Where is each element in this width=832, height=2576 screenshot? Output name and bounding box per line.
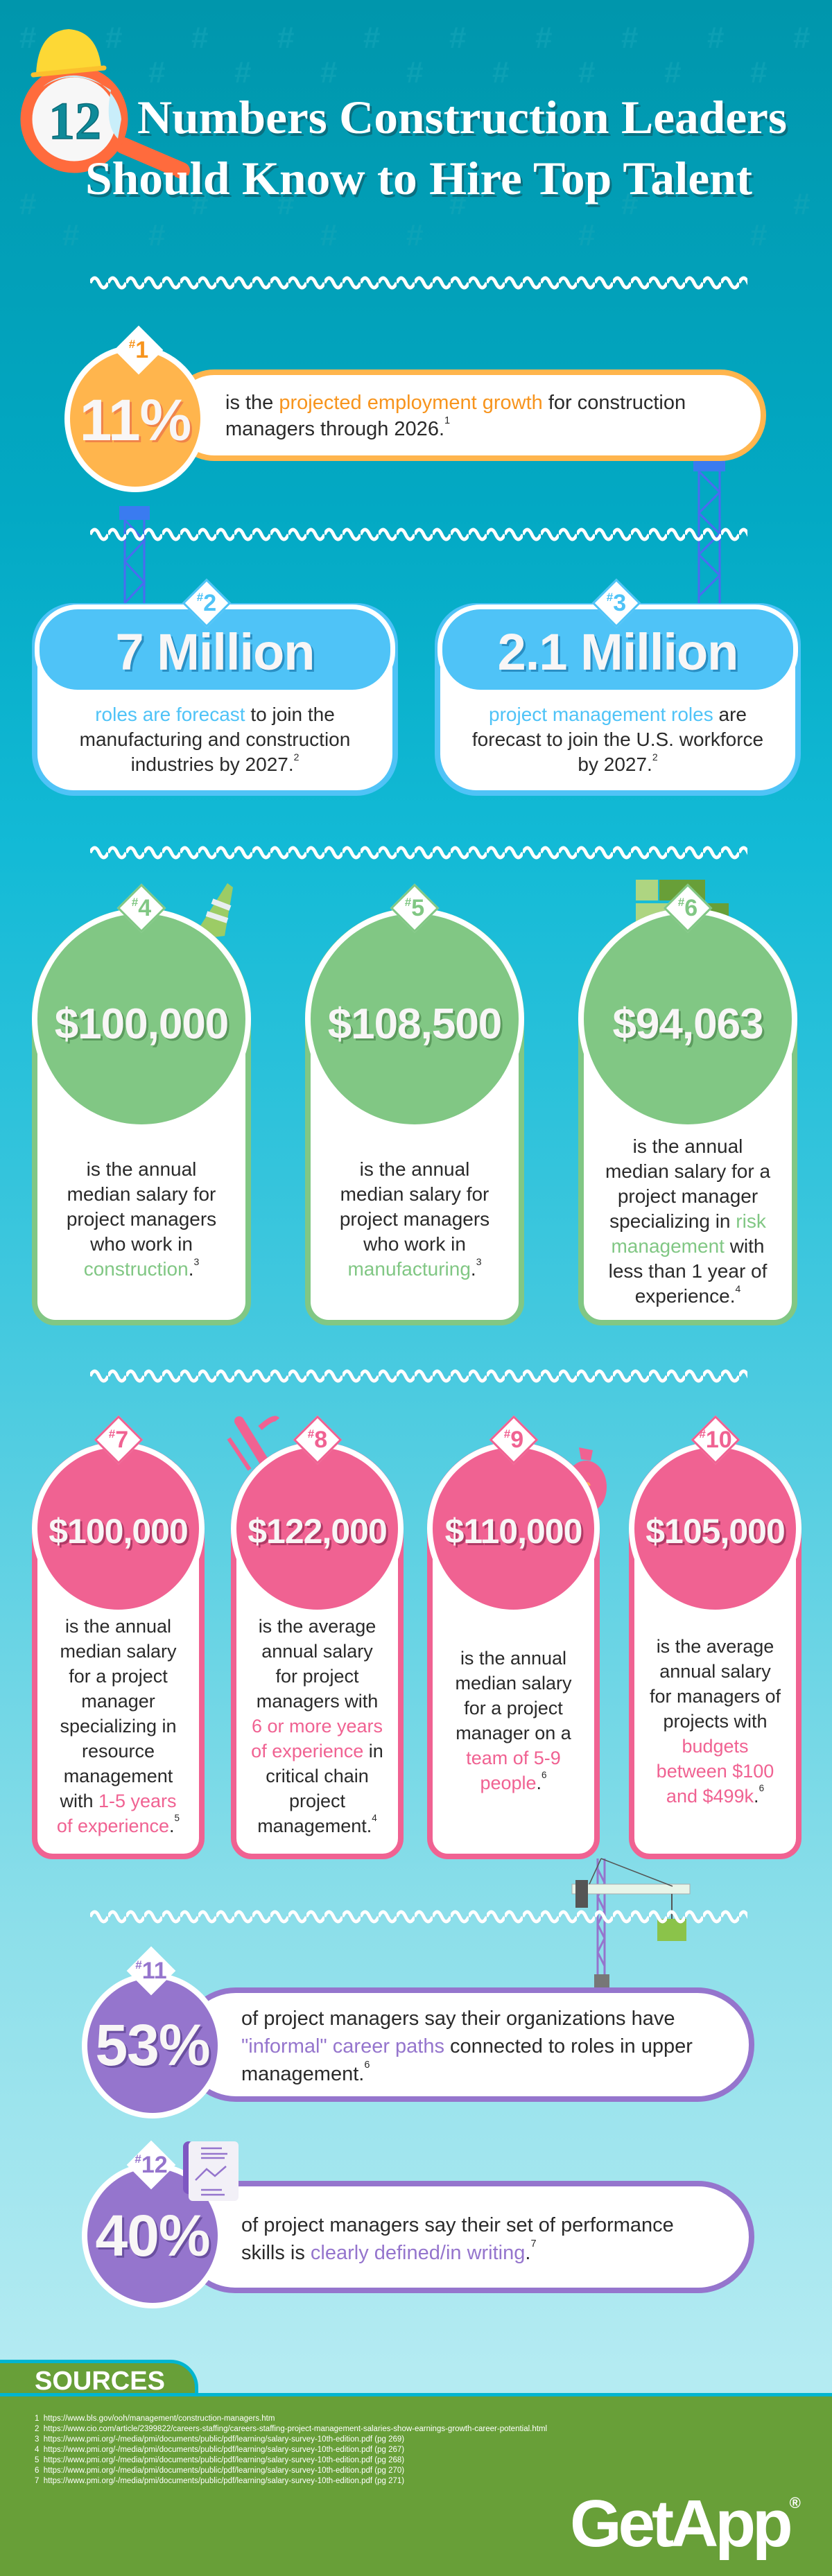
- text: is the annual: [360, 1158, 469, 1180]
- text: projects with: [663, 1711, 768, 1732]
- text: management.6: [241, 2060, 370, 2085]
- badge: #5: [405, 895, 424, 921]
- background hash marks: #: [406, 55, 423, 89]
- text: management.4: [257, 1813, 377, 1836]
- badge: [116, 883, 166, 933]
- text: median salary for: [340, 1183, 489, 1205]
- text: specializing in risk: [609, 1210, 766, 1232]
- badge: [691, 1416, 740, 1464]
- text: and $499k.6: [666, 1783, 764, 1807]
- text: team of 5-9: [466, 1748, 561, 1768]
- stat: 7 Million: [115, 623, 315, 681]
- text: is the projected employment growth for construction: [225, 392, 686, 414]
- text: project managers: [340, 1208, 489, 1230]
- text: specializing in: [60, 1716, 177, 1737]
- title: Should Know to Hire Top Talent: [85, 152, 752, 204]
- panel #4: [32, 883, 251, 1325]
- background hash marks: #: [535, 21, 552, 55]
- text: [57, 1616, 180, 1836]
- text: is the annual: [65, 1616, 171, 1637]
- text: by 2027.2: [578, 751, 658, 775]
- background hash marks: #: [664, 55, 681, 89]
- stat: $94,063: [612, 1000, 763, 1048]
- background hash marks: #: [449, 187, 466, 221]
- text: for a project: [69, 1666, 168, 1687]
- panel #7: [32, 1416, 205, 1859]
- text: is the average: [259, 1616, 376, 1637]
- background hash marks: #: [105, 21, 122, 55]
- text: [225, 392, 686, 440]
- panel #10: [629, 1416, 801, 1859]
- text: [629, 1634, 801, 1809]
- source list: 3 https://www.pmi.org/-/media/pmi/documents/public/pdf/learning/salary-survey-10th-edition.pdf (pg 269): [35, 2435, 404, 2444]
- panel #3: [435, 578, 801, 796]
- badge: [127, 2141, 175, 2189]
- panel #5: [305, 883, 524, 1325]
- text: is the average: [657, 1636, 774, 1657]
- background hash marks: #: [277, 21, 294, 55]
- badge: [293, 1416, 343, 1464]
- background hash marks: #: [19, 187, 36, 221]
- icon: purple crane: [569, 1855, 693, 1994]
- text: for a project: [464, 1698, 563, 1718]
- text: project management roles are: [489, 704, 747, 725]
- icon: bricks: [636, 880, 749, 928]
- icon: magnifier with hard hat and 12: 12: [49, 92, 101, 150]
- badge #1: #1: [129, 337, 148, 363]
- stat: $100,000: [55, 1000, 228, 1048]
- icon: traffic cone: [200, 883, 233, 937]
- text: 6 or more years: [252, 1716, 383, 1737]
- background hash marks: #: [793, 21, 810, 55]
- text: managers through 2026.1: [225, 415, 450, 440]
- stat: $108,500: [328, 1000, 501, 1048]
- text: [251, 1616, 383, 1836]
- text: manager: [81, 1691, 155, 1712]
- panel #9: [427, 1416, 600, 1859]
- text: experience.4: [635, 1283, 740, 1307]
- text: forecast to join the U.S. workforce: [472, 729, 763, 750]
- background hash marks: #: [191, 187, 208, 221]
- background hash marks: #: [406, 218, 423, 252]
- text: median salary: [60, 1641, 177, 1662]
- badge: #7: [109, 1427, 128, 1453]
- text: people.6: [480, 1770, 547, 1793]
- text: of experience.5: [57, 1813, 180, 1836]
- background hash marks: #: [363, 21, 380, 55]
- text: is the annual: [87, 1158, 196, 1180]
- background hash marks: #: [492, 55, 509, 89]
- text: with 1-5 years: [60, 1791, 177, 1811]
- text: [340, 1158, 489, 1280]
- source list: 6 https://www.pmi.org/-/media/pmi/documents/public/pdf/learning/salary-survey-10th-edition.pdf (pg 270): [35, 2466, 404, 2475]
- badge: [663, 883, 713, 933]
- divider: green zigzag: [90, 846, 747, 860]
- text: roles are forecast to join the: [95, 704, 335, 725]
- panel #12: [82, 2139, 756, 2308]
- logo: GetApp: GetApp®: [570, 2487, 801, 2561]
- text: skills is clearly defined/in writing.7: [241, 2238, 537, 2264]
- stat: 2.1 Million: [498, 623, 738, 681]
- background hash marks: #: [191, 21, 208, 55]
- badge: #9: [504, 1427, 523, 1453]
- pill: [179, 1987, 754, 2102]
- text: [472, 704, 763, 775]
- source list: [35, 2414, 547, 2487]
- badge: [489, 1416, 538, 1464]
- text: [455, 1648, 572, 1793]
- circle: [305, 908, 524, 1130]
- text: manager on a: [456, 1723, 571, 1743]
- circle 11%: [64, 345, 206, 492]
- header: [35, 604, 395, 695]
- text: median salary: [455, 1673, 572, 1694]
- panel #11: [82, 1948, 756, 2118]
- text: less than 1 year of: [609, 1260, 767, 1282]
- text: management: [64, 1766, 173, 1786]
- circle: [82, 2163, 223, 2308]
- text: for project: [275, 1666, 359, 1687]
- icon: money bag: [573, 1447, 607, 1508]
- background hash marks: #: [750, 55, 767, 89]
- circle: [629, 1442, 801, 1615]
- text: annual salary: [659, 1661, 771, 1682]
- crane towers blue: [119, 460, 725, 603]
- source list: 4 https://www.pmi.org/-/media/pmi/documents/public/pdf/learning/salary-survey-10th-edition.pdf (pg 267): [35, 2446, 404, 2454]
- circle: [578, 908, 797, 1130]
- background hash marks: #: [234, 55, 251, 89]
- source list: 1 https://www.bls.gov/ooh/management/construction-managers.htm: [35, 2414, 275, 2423]
- divider: teal zigzag: [90, 528, 747, 541]
- text: [67, 1158, 216, 1280]
- background hash marks: #: [62, 218, 79, 252]
- source list: 7 https://www.pmi.org/-/media/pmi/documents/public/pdf/learning/salary-survey-10th-edition.pdf (pg 271): [35, 2477, 404, 2485]
- text: construction.3: [84, 1256, 199, 1280]
- text: between $100: [657, 1761, 774, 1782]
- text: median salary for: [67, 1183, 216, 1205]
- background hash marks: #: [707, 21, 724, 55]
- sources band: [0, 2360, 832, 2576]
- panel #1: [64, 326, 766, 492]
- background hash marks: #: [320, 218, 337, 252]
- background hash marks: #: [148, 55, 165, 89]
- text: critical chain: [266, 1766, 369, 1786]
- header: [437, 604, 798, 695]
- title: Numbers Construction Leaders: [139, 94, 789, 146]
- text: budgets: [682, 1736, 749, 1757]
- background hash marks: #: [320, 55, 337, 89]
- text: [241, 2005, 693, 2088]
- circle: [82, 1973, 223, 2118]
- circle: [32, 1442, 205, 1615]
- title: Numbers Construction Leaders: [137, 91, 787, 143]
- divider: orange zigzag: [90, 276, 747, 290]
- background hash marks: #: [19, 21, 36, 55]
- circle: [32, 908, 251, 1130]
- text: resource: [82, 1741, 155, 1761]
- text: [80, 704, 350, 775]
- badge: #6: [678, 895, 697, 921]
- text: who work in: [363, 1233, 466, 1255]
- panel #2: [32, 578, 398, 796]
- text: of experience in: [251, 1741, 383, 1761]
- stat: 53%: 53%: [95, 2012, 210, 2078]
- text: who work in: [90, 1233, 193, 1255]
- background hash marks: #: [449, 21, 466, 55]
- title: [85, 91, 789, 207]
- text: industries by 2027.2: [131, 751, 299, 775]
- badge: [94, 1416, 143, 1464]
- text: of project managers say their organizations have: [241, 2008, 675, 2030]
- badge: #2: [197, 590, 216, 616]
- background hash marks: #: [621, 187, 638, 221]
- background hash marks: #: [578, 218, 595, 252]
- text: of project managers say their set of performance: [241, 2214, 674, 2236]
- text: manufacturing.3: [347, 1256, 481, 1280]
- badge: #4: [132, 895, 151, 921]
- text: project managers: [67, 1208, 216, 1230]
- text: "informal" career paths connected to roles in upper: [241, 2035, 693, 2057]
- icon: money bag: $: [580, 1478, 591, 1501]
- badge: [592, 578, 641, 628]
- text: management with: [611, 1235, 764, 1257]
- icon: magnifier with hard hat and 12: [21, 29, 190, 179]
- badge: #10: [699, 1427, 732, 1453]
- divider: pink zigzag: [90, 1370, 747, 1382]
- text: project: [289, 1791, 345, 1811]
- text: is the annual: [633, 1135, 743, 1157]
- stat: $105,000: [645, 1512, 785, 1551]
- icon: hammer and screwdriver: [227, 1416, 279, 1471]
- circle: [231, 1442, 404, 1615]
- text: manufacturing and construction: [80, 729, 350, 750]
- text: for managers of: [650, 1686, 781, 1707]
- stat: 11%: 11%: [80, 388, 191, 453]
- text: project manager: [618, 1185, 758, 1207]
- heading: sources: SOURCES: [35, 2367, 165, 2396]
- background hash marks: #: [793, 187, 810, 221]
- badge: [390, 883, 440, 933]
- background hash marks: #: [148, 218, 165, 252]
- badge: [182, 578, 232, 628]
- stat: $122,000: [248, 1512, 387, 1551]
- badge #1: [116, 326, 164, 374]
- stat: $110,000: [445, 1512, 582, 1551]
- badge: [127, 1947, 175, 1995]
- text: managers with: [257, 1691, 378, 1712]
- background hash marks: #: [578, 55, 595, 89]
- text: [241, 2211, 674, 2267]
- badge: #3: [607, 590, 626, 616]
- pill: [179, 2181, 754, 2293]
- background hash marks: #: [277, 187, 294, 221]
- background hash marks: [19, 21, 810, 252]
- source list: 5 https://www.pmi.org/-/media/pmi/documents/public/pdf/learning/salary-survey-10th-edition.pdf (pg 268): [35, 2456, 404, 2464]
- text: median salary for a: [605, 1160, 770, 1182]
- source list: 2 https://www.cio.com/article/2399822/careers-staffing/careers-staffing-project-management-salaries-show-earnings-growth-career-potential.html: [35, 2425, 547, 2433]
- circle: [427, 1442, 600, 1615]
- icon: document chart: [183, 2141, 240, 2201]
- badge: #12: [135, 2152, 168, 2178]
- stat: 40%: 40%: [95, 2203, 210, 2268]
- panel #8: [231, 1416, 404, 1859]
- text: [605, 1135, 771, 1307]
- divider: purple zigzag: [90, 1908, 749, 1932]
- background hash marks: #: [621, 21, 638, 55]
- badge: #8: [308, 1427, 327, 1453]
- background hash marks: #: [750, 218, 767, 252]
- badge: #11: [135, 1958, 167, 1984]
- text: annual salary: [261, 1641, 373, 1662]
- pill: [168, 369, 766, 461]
- title: Should Know to Hire Top Talent: [87, 155, 754, 207]
- stat: $100,000: [49, 1512, 188, 1551]
- panel #6: [578, 883, 797, 1325]
- text: is the annual: [460, 1648, 566, 1669]
